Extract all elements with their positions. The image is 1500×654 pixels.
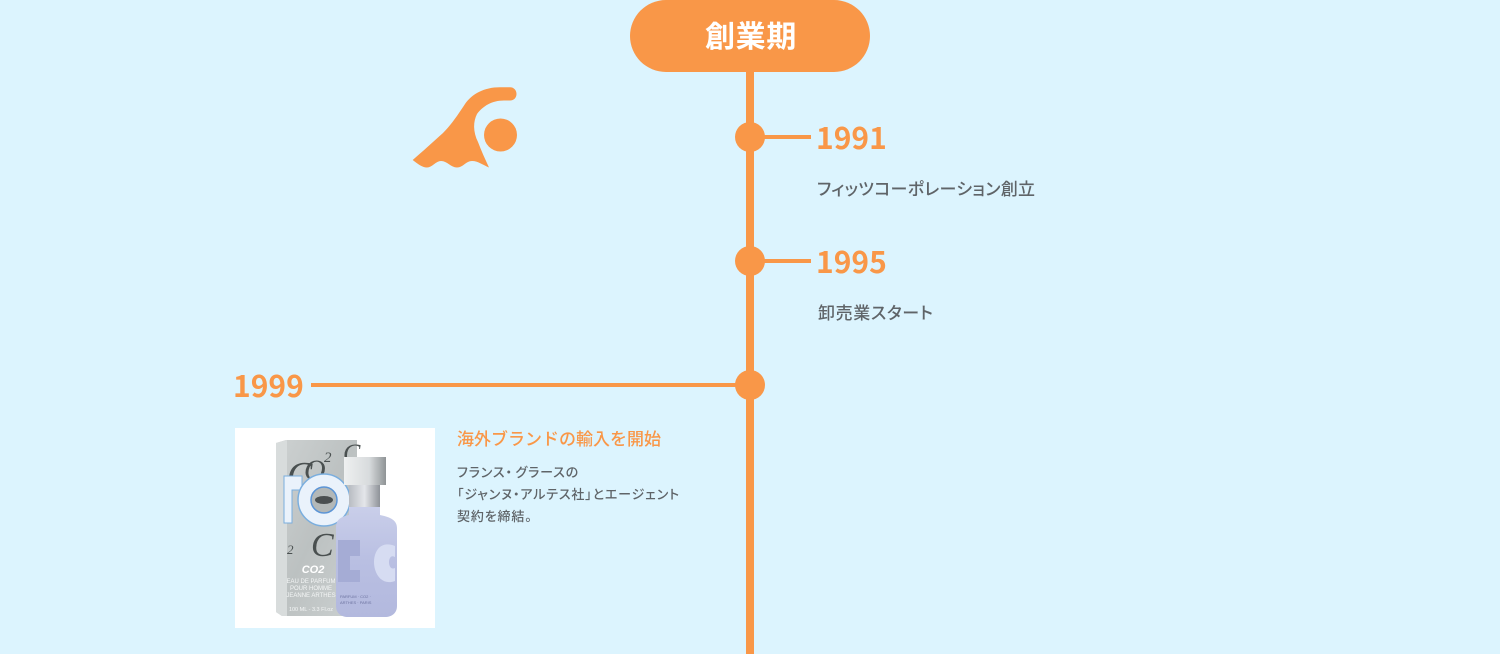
1991 node	[735, 122, 765, 152]
script lettering on box: O	[304, 454, 326, 487]
script lettering on box: C	[343, 439, 361, 468]
box small print: EAU DE PARFUM	[287, 579, 335, 585]
1999 connector	[311, 383, 741, 387]
1999 description: 契約を締結。	[457, 506, 533, 525]
box small print	[286, 564, 336, 613]
script lettering on box: C	[287, 455, 313, 497]
timeline axis	[746, 60, 754, 654]
1991 year: 1991	[816, 114, 887, 158]
1999 description: 「ジャンヌ・アルテス社」とエージェント	[457, 484, 680, 503]
era heading pill: 創業期	[705, 12, 797, 56]
box small print: CO2	[302, 564, 324, 576]
1999 heading: 海外ブランドの輸入を開始	[457, 425, 661, 450]
1995 connector	[760, 259, 811, 263]
product photo: perfume box and bottle: ARTHES · PARIS	[340, 600, 372, 605]
1999 node	[735, 370, 765, 400]
script lettering on box: 2	[287, 542, 294, 557]
1995 description: 卸売業スタート	[818, 299, 934, 324]
1999 description: フランス・グラースの	[457, 462, 579, 481]
big C and O	[284, 476, 302, 523]
product photo: perfume box and bottle: PARFUM · CO2 ·	[340, 594, 371, 599]
1995 node	[735, 246, 765, 276]
box small print: POUR HOMME	[290, 586, 332, 592]
bottle	[336, 505, 397, 617]
box small print: 100 ML - 3.3 Fl.oz	[289, 607, 333, 613]
1995 year: 1995	[816, 238, 887, 282]
1999 year: 1999	[233, 362, 304, 406]
script lettering on box: C	[311, 527, 334, 564]
box body	[276, 440, 357, 616]
box small print: JEANNE ARTHES	[286, 593, 336, 599]
script lettering on box: 2	[324, 450, 332, 466]
product photo: perfume box and bottle	[235, 428, 435, 628]
1991 description: フィッツコーポレーション創立	[817, 175, 1035, 200]
1991 connector	[760, 135, 811, 139]
1999 description	[457, 462, 680, 525]
era heading pill	[630, 0, 870, 72]
icon: wave and circle logo	[412, 87, 517, 168]
script lettering on box	[287, 439, 361, 564]
